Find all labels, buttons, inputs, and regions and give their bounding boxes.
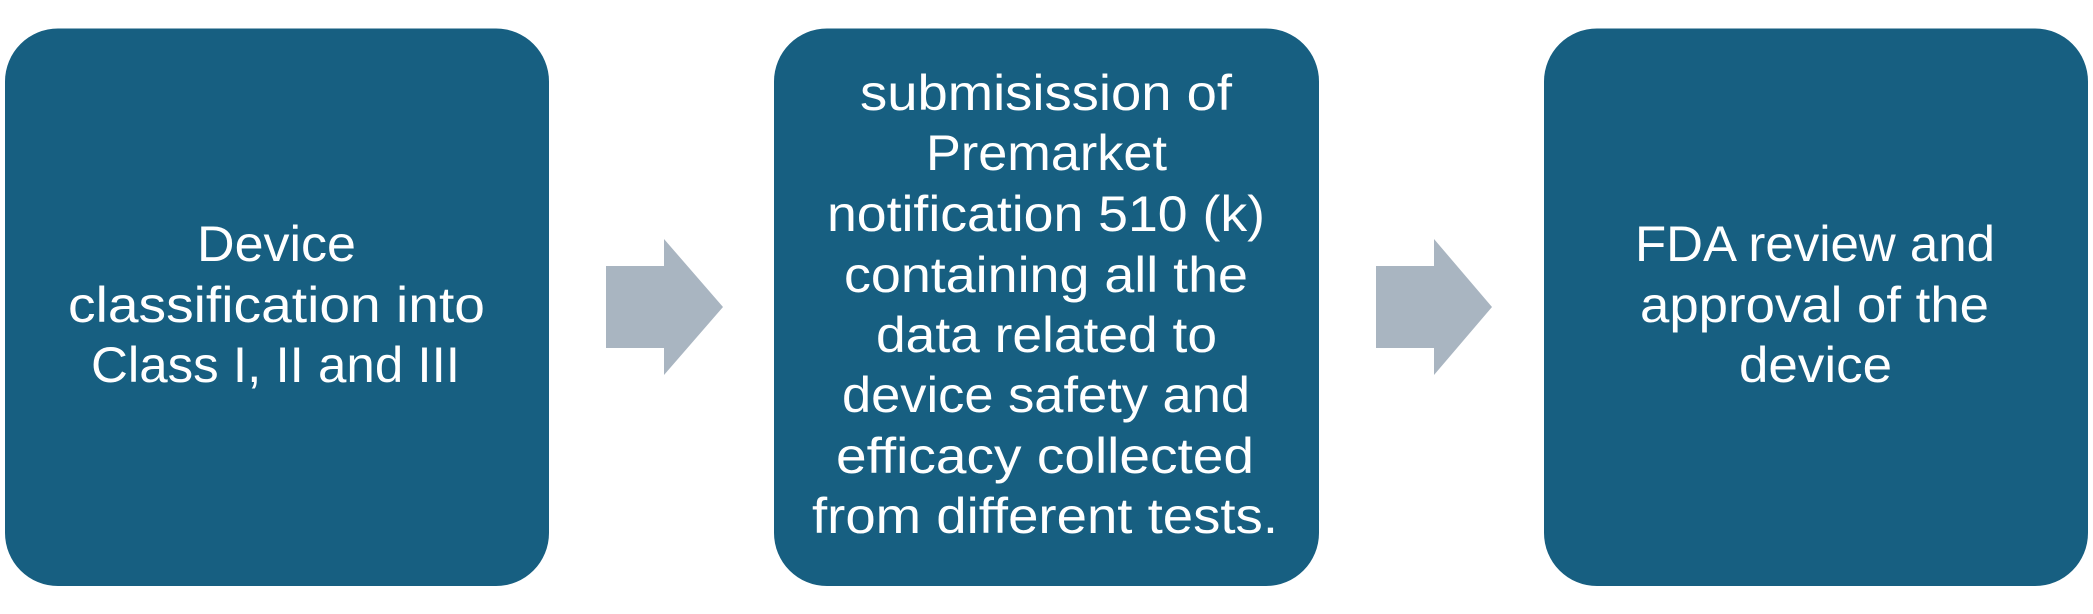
text: premarket notification submission: device safety and xyxy=(842,367,1250,423)
arrow: step one to step two xyxy=(606,239,723,375)
text: FDA review and approval: approval of the xyxy=(1640,277,1989,333)
panel: device classification xyxy=(5,28,549,586)
text: FDA review and approval: FDA review and xyxy=(1635,216,1995,272)
text: premarket notification submission: containing all the xyxy=(844,247,1248,303)
panel: premarket notification submission xyxy=(774,28,1319,586)
arrow: step two to step three xyxy=(1376,239,1492,375)
text: premarket notification submission xyxy=(812,65,1278,544)
text: premarket notification submission: efficacy collected xyxy=(836,428,1254,484)
text: device classification: Device xyxy=(197,216,356,272)
text: premarket notification submission: from different tests. xyxy=(812,488,1278,544)
text: premarket notification submission: notification 510 (k) xyxy=(827,186,1265,242)
text: premarket notification submission: Premarket xyxy=(926,125,1167,181)
text: premarket notification submission: data related to xyxy=(876,307,1217,363)
text: FDA review and approval xyxy=(1635,216,1995,393)
text: FDA review and approval: device xyxy=(1739,337,1892,393)
panel: FDA review and approval xyxy=(1544,28,2088,586)
text: premarket notification submission: submisission of xyxy=(860,65,1232,121)
text: device classification: Class I, II and III xyxy=(91,337,460,393)
text: device classification: classification into xyxy=(68,277,485,333)
text: device classification xyxy=(68,216,485,393)
